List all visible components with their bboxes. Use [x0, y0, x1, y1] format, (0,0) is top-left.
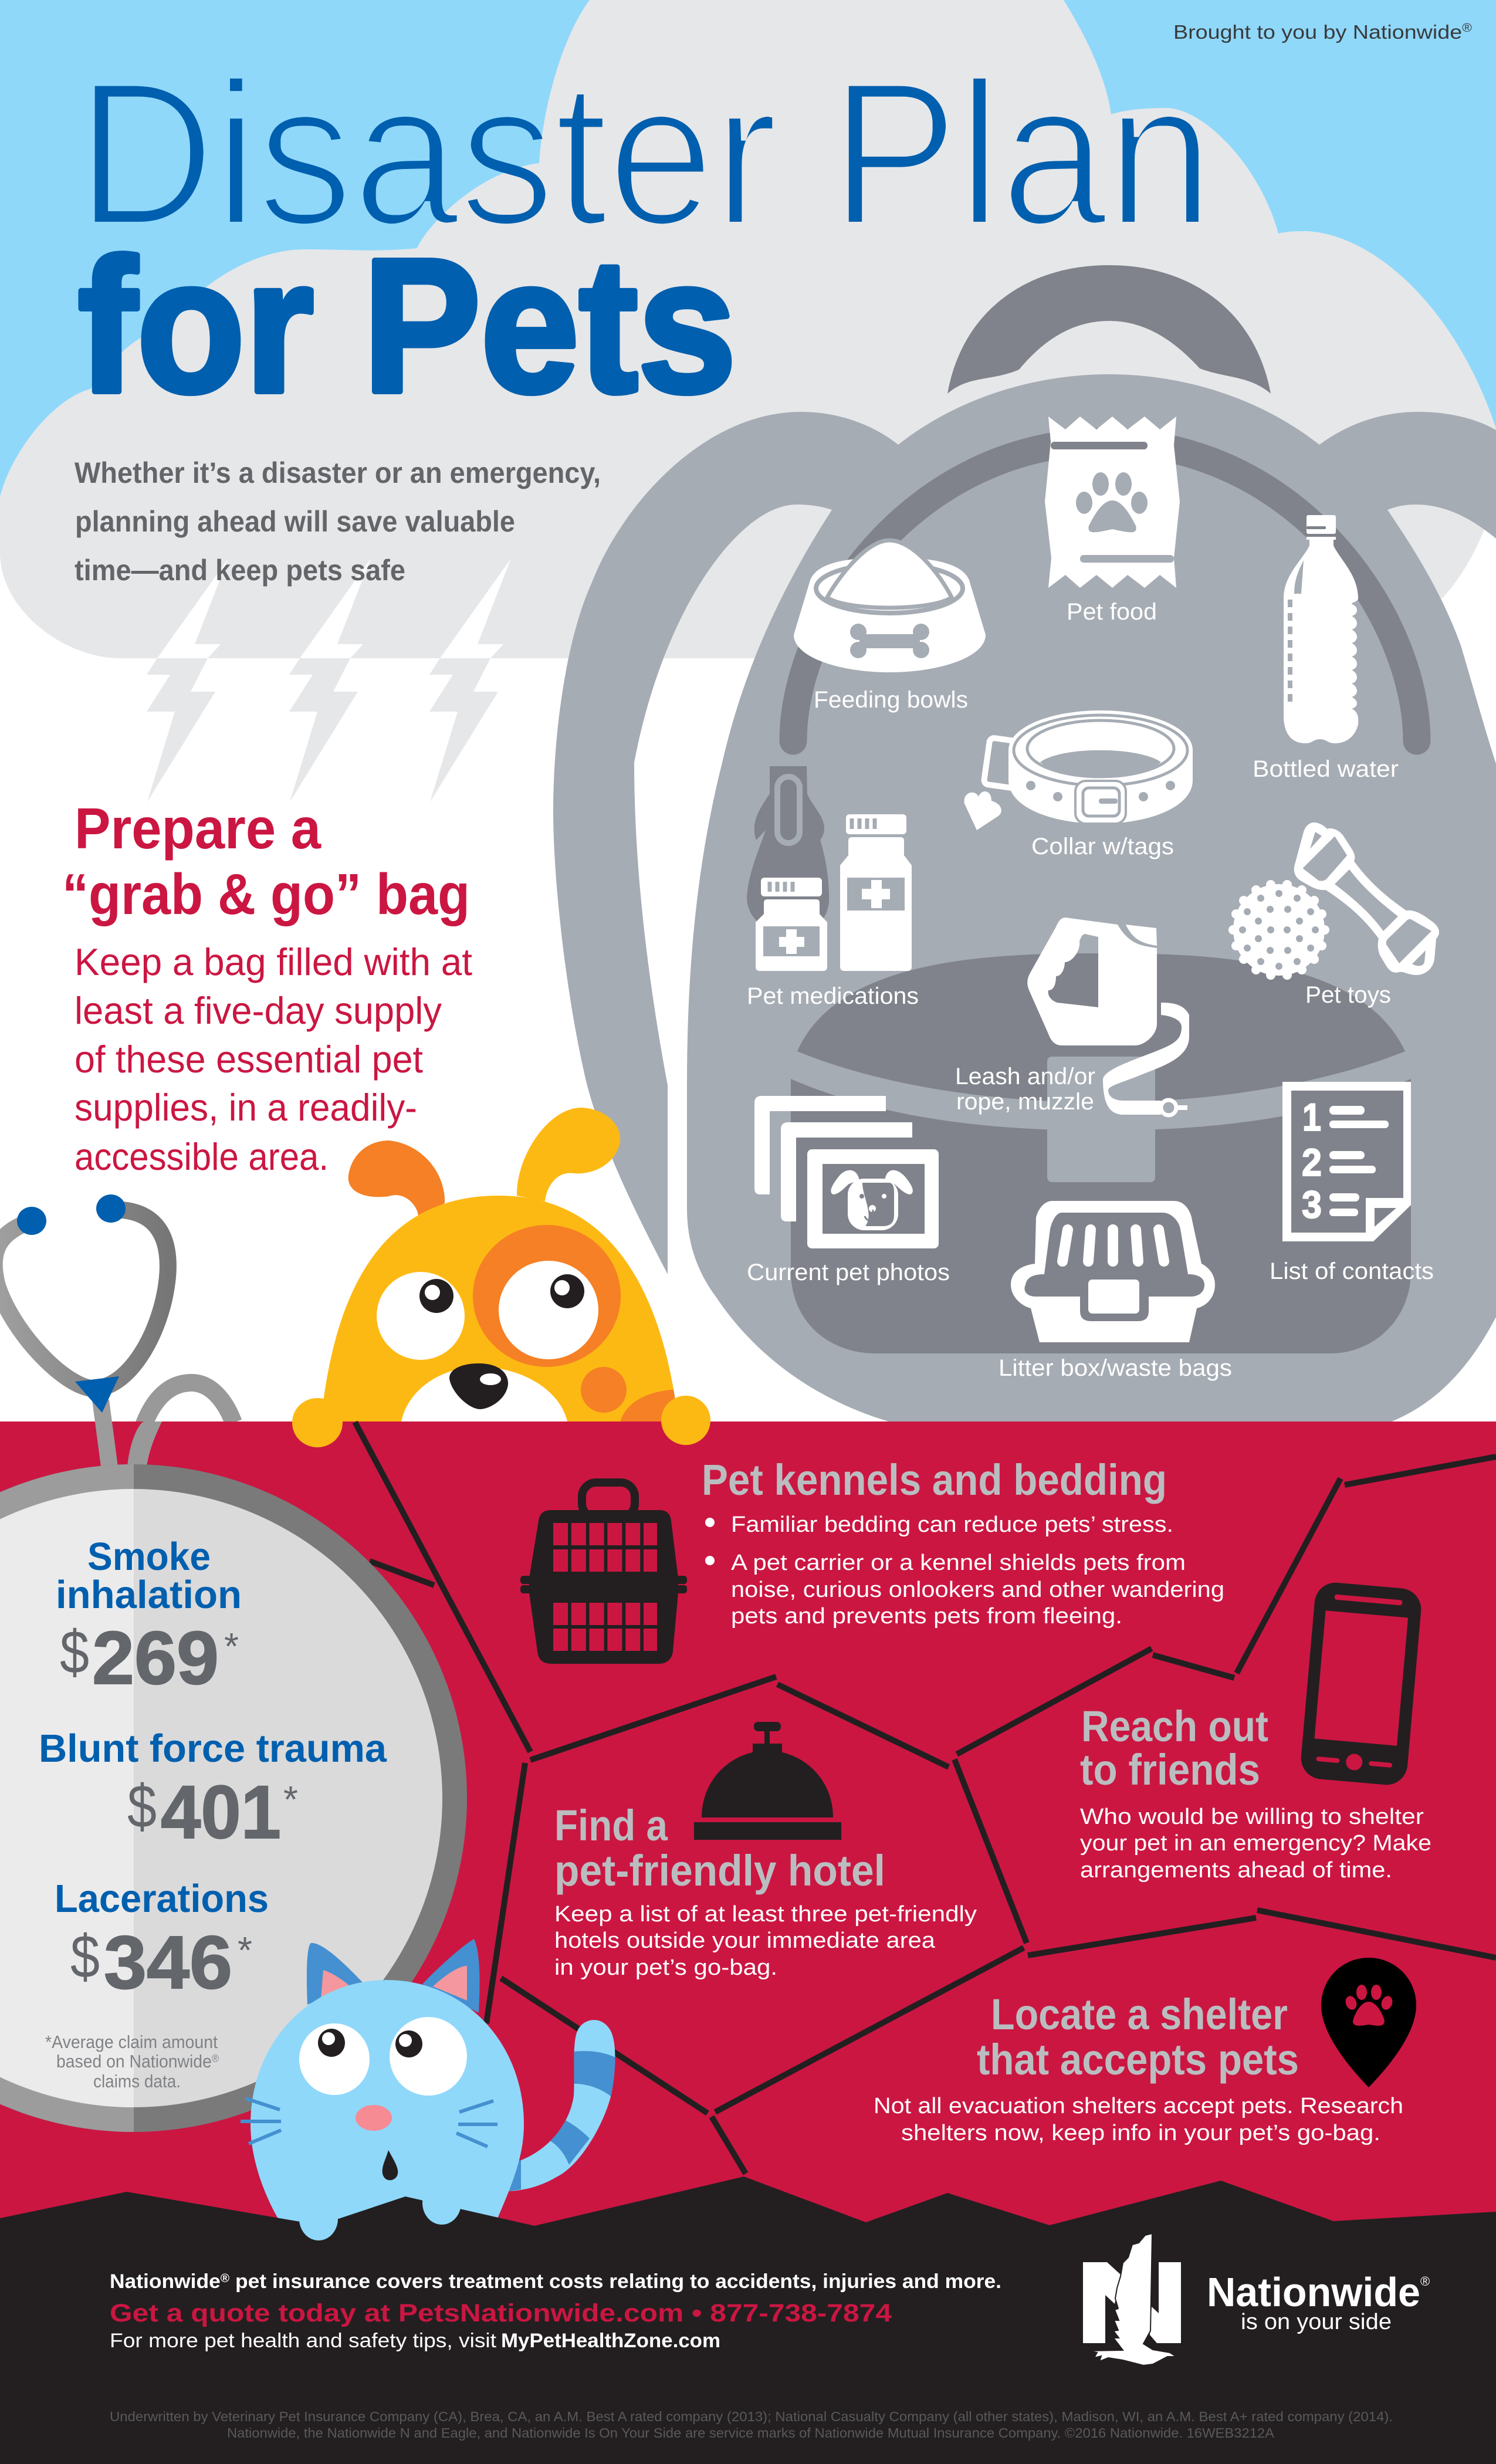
label: list of contacts: List of contacts [1270, 1258, 1434, 1284]
heading: Pet kennels and bedding [702, 1456, 1167, 1504]
footnote: claims data. [93, 2071, 181, 2091]
icon: hotel bell [694, 1722, 841, 1840]
icon: litter box carrier [1011, 1201, 1215, 1342]
icon: phone [1299, 1581, 1423, 1786]
heading: to friends [1080, 1745, 1260, 1794]
disc rim [0, 1464, 467, 2132]
legal text: Nationwide, the Nationwide N and Eagle, and Nationwide Is On Your Side are service marks of Nationwide Mutual Insurance Company. ©2016 Nationwide. 16WEB3212A [227, 2425, 1275, 2441]
dog right ear [517, 1108, 620, 1201]
body text: your pet in an emergency? Make [1080, 1831, 1431, 1856]
icon: feeding bowl [794, 540, 986, 672]
insurance line: Nationwide [110, 2270, 216, 2293]
body text [1080, 1805, 1431, 1883]
icon: list of contacts: 3 [1302, 1183, 1322, 1226]
pocket flap [797, 953, 1405, 1102]
text: grab and go description: of these essential pet [75, 1038, 423, 1081]
label: collar: Collar w/tags [1031, 834, 1174, 859]
disc face [0, 1489, 442, 2107]
logo wordmark: Nationwide [1207, 2269, 1420, 2315]
stethoscope tube over red [75, 1376, 162, 1467]
bullet list: A pet carrier or a kennel shields pets from [731, 1551, 1186, 1575]
heading: pet-friendly hotel [554, 1846, 885, 1895]
body text: Keep a list of at least three pet-friendly [554, 1902, 977, 1927]
cost: lacerations: * [238, 1929, 252, 1971]
body text [874, 2094, 1403, 2145]
heading: prepare a grab and go bag: “grab & go” bag [62, 862, 470, 926]
cost: lacerations: Lacerations [55, 1877, 269, 1921]
Nationwide logo [1083, 2233, 1430, 2365]
cat mouth [383, 2150, 398, 2180]
cost: smoke inhalation [56, 1535, 242, 1700]
subtitle: planning ahead will save valuable [75, 505, 515, 538]
dog left ear [348, 1140, 445, 1216]
stethoscope disc with injury costs [0, 1464, 467, 2132]
dog portrait [831, 1170, 913, 1230]
dog eyes [377, 1261, 598, 1360]
spiky ball [1228, 880, 1329, 980]
backpack zipper seam [793, 442, 1417, 741]
body text [554, 1902, 977, 1980]
cost: smoke inhalation: 269 [92, 1616, 219, 1700]
footnote [45, 2032, 219, 2091]
footnote: *Average claim amount [45, 2032, 218, 2052]
cost: blunt force trauma: Blunt force trauma [39, 1727, 387, 1771]
cat ears [307, 1939, 480, 2013]
body text: arrangements ahead of time. [1080, 1858, 1392, 1883]
title line: Disaster Plan: Disaster Plan [77, 39, 1213, 268]
title [77, 39, 1213, 432]
cat eyes [299, 2017, 467, 2096]
icon: pet food bag [1045, 417, 1180, 588]
backpack handle [947, 265, 1271, 394]
body text: hotels outside your immediate area [554, 1928, 936, 1953]
text: grab and go description: accessible area. [75, 1135, 329, 1178]
cost: lacerations: $ [70, 1923, 100, 1991]
heading: Find a [554, 1801, 668, 1850]
tips line: MyPetHealthZone.com [501, 2330, 720, 2352]
bolt 3 [429, 559, 511, 802]
backpack [553, 265, 1496, 1426]
heading: prepare a grab and go bag: Prepare a [75, 796, 321, 861]
bullet list: noise, curious onlookers and other wandering [731, 1578, 1224, 1602]
icon: list of contacts: 1 [1302, 1095, 1321, 1139]
small medicine bottle [756, 878, 827, 971]
label: bottled water: Bottled water [1253, 756, 1399, 782]
sky background [0, 0, 1496, 505]
panel: pet kennels and bedding [520, 1456, 1224, 1664]
heading [1080, 1702, 1268, 1794]
logo tagline: is on your side [1241, 2310, 1392, 2334]
panel: reach out to friends [1080, 1581, 1431, 1883]
bullet list [705, 1512, 1224, 1629]
dog muzzle [401, 1367, 567, 1421]
bullet list: pets and prevents pets from fleeing. [731, 1604, 1122, 1629]
footer call to action [110, 2270, 1001, 2352]
cat character [241, 1939, 619, 2229]
heading: Reach out [1081, 1702, 1268, 1751]
icon: map pin with paw [1321, 1958, 1416, 2087]
heading [554, 1801, 885, 1895]
dog head [321, 1196, 678, 1421]
cat whiskers [241, 2099, 497, 2147]
cost: smoke inhalation: inhalation [56, 1573, 242, 1617]
label: leash and/or rope, muzzle: rope, muzzle [956, 1089, 1094, 1115]
cost: blunt force trauma: 401 [161, 1771, 281, 1854]
text: grab and go description: supplies, in a readily- [75, 1086, 417, 1129]
label: pet medications: Pet medications [747, 983, 919, 1009]
icon: leash [1027, 918, 1189, 1115]
footnote: ® [212, 2053, 219, 2064]
heading: Locate a shelter [991, 1990, 1288, 2039]
heading [977, 1990, 1299, 2084]
insurance line: pet insurance covers treatment costs relating to accidents, injuries and more. [229, 2270, 1001, 2293]
red section background [0, 1421, 1496, 2243]
legal text [110, 2409, 1393, 2441]
body text: Not all evacuation shelters accept pets. Research [874, 2094, 1403, 2118]
dog character [321, 1108, 692, 1421]
cost: smoke inhalation: Smoke [87, 1535, 211, 1579]
cat body [251, 1980, 524, 2229]
front pocket [791, 1079, 1411, 1353]
cracks in ground [355, 1422, 1496, 2174]
tips line [110, 2330, 720, 2352]
label: leash and/or rope, muzzle [955, 1064, 1095, 1115]
insurance line: ® [221, 2272, 229, 2285]
cost: smoke inhalation: $ [60, 1619, 89, 1687]
cost: blunt force trauma [39, 1727, 387, 1854]
icon: pet toys [1228, 823, 1439, 980]
logo N and eagle [1083, 2233, 1181, 2365]
quote line: Get a quote today at PetsNationwide.com • 877-738-7874 [110, 2299, 892, 2327]
dog nose [449, 1363, 508, 1409]
panel: locate a shelter [874, 1958, 1416, 2145]
subtitle: time—and keep pets safe [75, 554, 405, 587]
lightning bolts [147, 559, 511, 802]
body text: shelters now, keep info in your pet’s go-bag. [901, 2121, 1380, 2145]
label: leash and/or rope, muzzle: Leash and/or [955, 1064, 1095, 1089]
icon: current pet photos [754, 1096, 939, 1248]
label: feeding bowls: Feeding bowls [814, 687, 968, 713]
toy bone [1294, 823, 1439, 975]
cost: lacerations [55, 1877, 269, 2005]
cost: blunt force trauma: $ [127, 1773, 157, 1841]
icon: pet medications [747, 766, 912, 971]
cat nose [356, 2105, 392, 2131]
footnote: based on Nationwide [56, 2051, 226, 2072]
subtitle [75, 456, 601, 587]
cat feet [299, 2181, 461, 2240]
logo registered mark: ® [1420, 2274, 1430, 2289]
heading: prepare a grab and go bag [62, 796, 470, 926]
tips line: For more pet health and safety tips, visit [110, 2330, 497, 2352]
storm cloud [0, 0, 1496, 658]
pocket tab [1047, 1057, 1155, 1182]
cat tail [505, 2020, 619, 2191]
icon: collar with tags [964, 710, 1193, 830]
icon: list of contacts [1282, 1082, 1411, 1241]
subtitle: Whether it’s a disaster or an emergency, [75, 456, 601, 489]
heading: that accepts pets [977, 2035, 1299, 2084]
sponsor line: Brought to you by Nationwide [1173, 21, 1426, 43]
bullet list: Familiar bedding can reduce pets’ stress. [731, 1512, 1173, 1537]
title line: for Pets: for Pets [78, 219, 736, 432]
cost: smoke inhalation: * [224, 1625, 239, 1667]
large medicine bottle [840, 814, 912, 971]
text: grab and go description [75, 940, 472, 1178]
cost: blunt force trauma: * [283, 1778, 298, 1820]
text: grab and go description: Keep a bag filled with at [75, 940, 472, 983]
icon: kennel [520, 1483, 687, 1664]
cost: lacerations: 346 [104, 1921, 232, 2005]
sponsor line: ® [1462, 22, 1472, 35]
bolt 2 [289, 559, 371, 802]
bolt 1 [147, 559, 228, 802]
stethoscope tubing [0, 1194, 233, 1470]
dog markings [473, 1225, 692, 1421]
icon: bottled water [1284, 515, 1358, 743]
body text: in your pet’s go-bag. [554, 1955, 777, 1980]
footer black band [0, 2177, 1496, 2464]
dog paws [292, 1396, 710, 1447]
icon: list of contacts: 2 [1302, 1140, 1322, 1184]
body text: Who would be willing to shelter [1080, 1805, 1424, 1829]
label: pet toys: Pet toys [1305, 982, 1391, 1008]
legal text: Underwritten by Veterinary Pet Insurance Company (CA), Brea, CA, an A.M. Best A rated company (2013); National Casualty Company (all other states), Madison, WI, an A.M. Best A+ rated company (2014). [110, 2409, 1393, 2424]
label: pet food: Pet food [1067, 599, 1157, 625]
backpack body and straps [553, 374, 1496, 1426]
panel: find a pet-friendly hotel [554, 1722, 977, 1980]
text: grab and go description: least a five-day supply [75, 989, 442, 1032]
label: current pet photos: Current pet photos [747, 1260, 950, 1285]
label: litter box/waste bags: Litter box/waste bags [999, 1355, 1232, 1381]
